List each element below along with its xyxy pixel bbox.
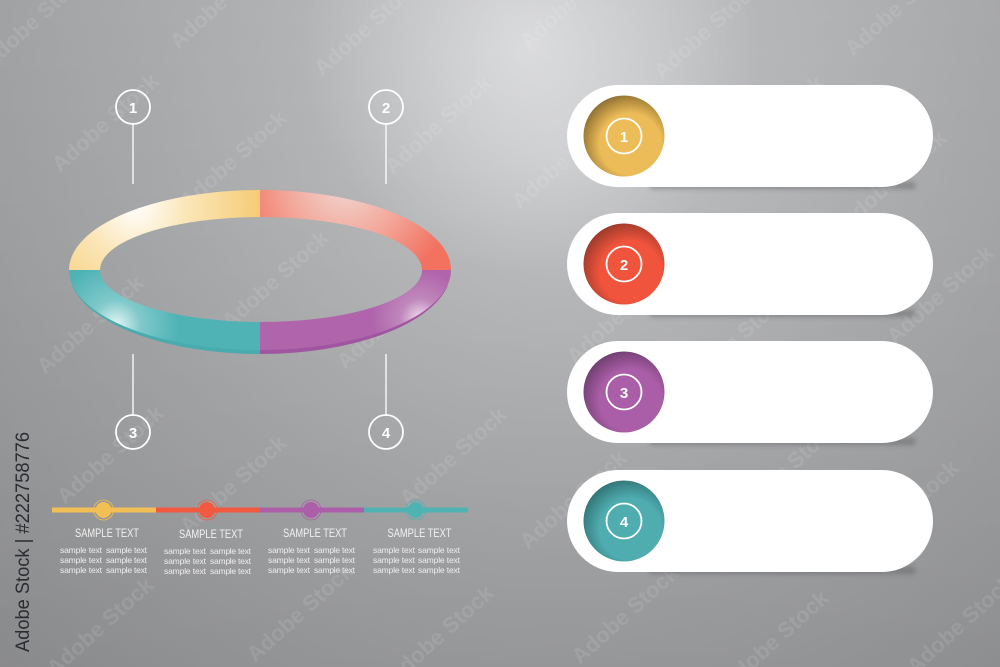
timeline column 1: sample text (60, 545, 103, 555)
pill card 4: 4 (620, 514, 629, 531)
callout 1: 1 (129, 100, 137, 117)
callout 3: 3 (129, 425, 137, 442)
ring segment: purple rim (260, 285, 448, 354)
timeline column 2: sample text (210, 556, 252, 566)
watermarks: Adobe Stock (515, 445, 632, 554)
watermarks: Adobe Stock (175, 105, 292, 214)
timeline column 2: sample text (164, 566, 207, 576)
ring segment: teal (69, 270, 260, 350)
watermarks: Adobe Stock (712, 70, 829, 179)
timeline column 1: sample text (106, 555, 148, 565)
watermarks: Adobe Stock (882, 240, 999, 349)
timeline column 3: sample text (314, 545, 356, 555)
pill card 3 (567, 341, 933, 445)
pill card 2: 2 (620, 257, 628, 274)
vertical stock id text: Adobe Stock | #222758776 (13, 432, 34, 652)
timeline column 3: sample text (314, 555, 356, 565)
timeline column 3: sample text (314, 565, 356, 575)
watermarks: Adobe Stock (507, 105, 624, 214)
watermarks: Adobe Stock (847, 455, 964, 564)
pill card 2 (567, 213, 933, 317)
timeline column 1: sample text (60, 555, 103, 565)
ring chart (69, 190, 451, 354)
ring segment: yellow (69, 190, 260, 270)
watermarks: Adobe Stock (380, 70, 497, 179)
ring segment: red (260, 190, 451, 270)
timeline column 2: sample text (164, 546, 207, 556)
pill card 1: 1 (620, 129, 628, 146)
callout 2 (369, 90, 403, 184)
watermarks: Adobe Stock (395, 402, 512, 511)
timeline column 2: sample text (210, 566, 252, 576)
timeline column 2: sample text (210, 546, 252, 556)
callout 1 (116, 90, 150, 184)
timeline column 4: sample text (373, 555, 416, 565)
timeline column 1: sample text (106, 545, 148, 555)
timeline column 4 (364, 500, 468, 575)
watermarks: Adobe Stock (567, 560, 684, 667)
timeline column 4: sample text (373, 565, 416, 575)
watermarks: Adobe Stock (727, 415, 844, 524)
pill card 1 (567, 85, 933, 189)
timeline column 2 (156, 500, 260, 576)
callout 2: 2 (382, 100, 390, 117)
timeline column 3: SAMPLE TEXT (283, 526, 348, 540)
ring segment: teal rim (72, 285, 260, 354)
pill card 3: 3 (620, 385, 628, 402)
timeline column 1: SAMPLE TEXT (75, 526, 140, 540)
watermarks: Adobe Stock (242, 558, 359, 667)
timeline column 4: sample text (418, 555, 461, 565)
timeline column 4: SAMPLE TEXT (388, 526, 452, 540)
watermarks: Adobe Stock (52, 400, 169, 509)
timeline column 3: sample text (268, 555, 311, 565)
watermarks: Adobe Stock (677, 285, 794, 394)
watermarks: Adobe Stock (32, 270, 149, 379)
pill card 4 (567, 470, 933, 574)
timeline column 3: sample text (268, 565, 311, 575)
timeline column 4: sample text (418, 545, 461, 555)
timeline column 3: sample text (268, 545, 311, 555)
watermarks: Adobe Stock (47, 68, 164, 177)
timeline column 1: sample text (60, 565, 103, 575)
watermarks: Adobe Stock (562, 260, 679, 369)
watermarks: Adobe Stock (217, 225, 334, 334)
callout 4: 4 (382, 425, 391, 442)
timeline column 2: SAMPLE TEXT (179, 527, 244, 541)
timeline column 4: sample text (373, 545, 416, 555)
timeline column 1 (52, 500, 156, 575)
callout 4 (369, 354, 403, 449)
timeline column 3 (260, 500, 364, 575)
watermarks: Adobe Stock (835, 125, 952, 234)
callout 3 (116, 354, 150, 449)
watermarks: Adobe Stock (332, 265, 449, 374)
timeline column 1: sample text (106, 565, 148, 575)
ring segment: purple (260, 270, 451, 350)
timeline column 2: sample text (164, 556, 207, 566)
watermarks: Adobe Stock (175, 430, 292, 539)
timeline column 4: sample text (418, 565, 461, 575)
